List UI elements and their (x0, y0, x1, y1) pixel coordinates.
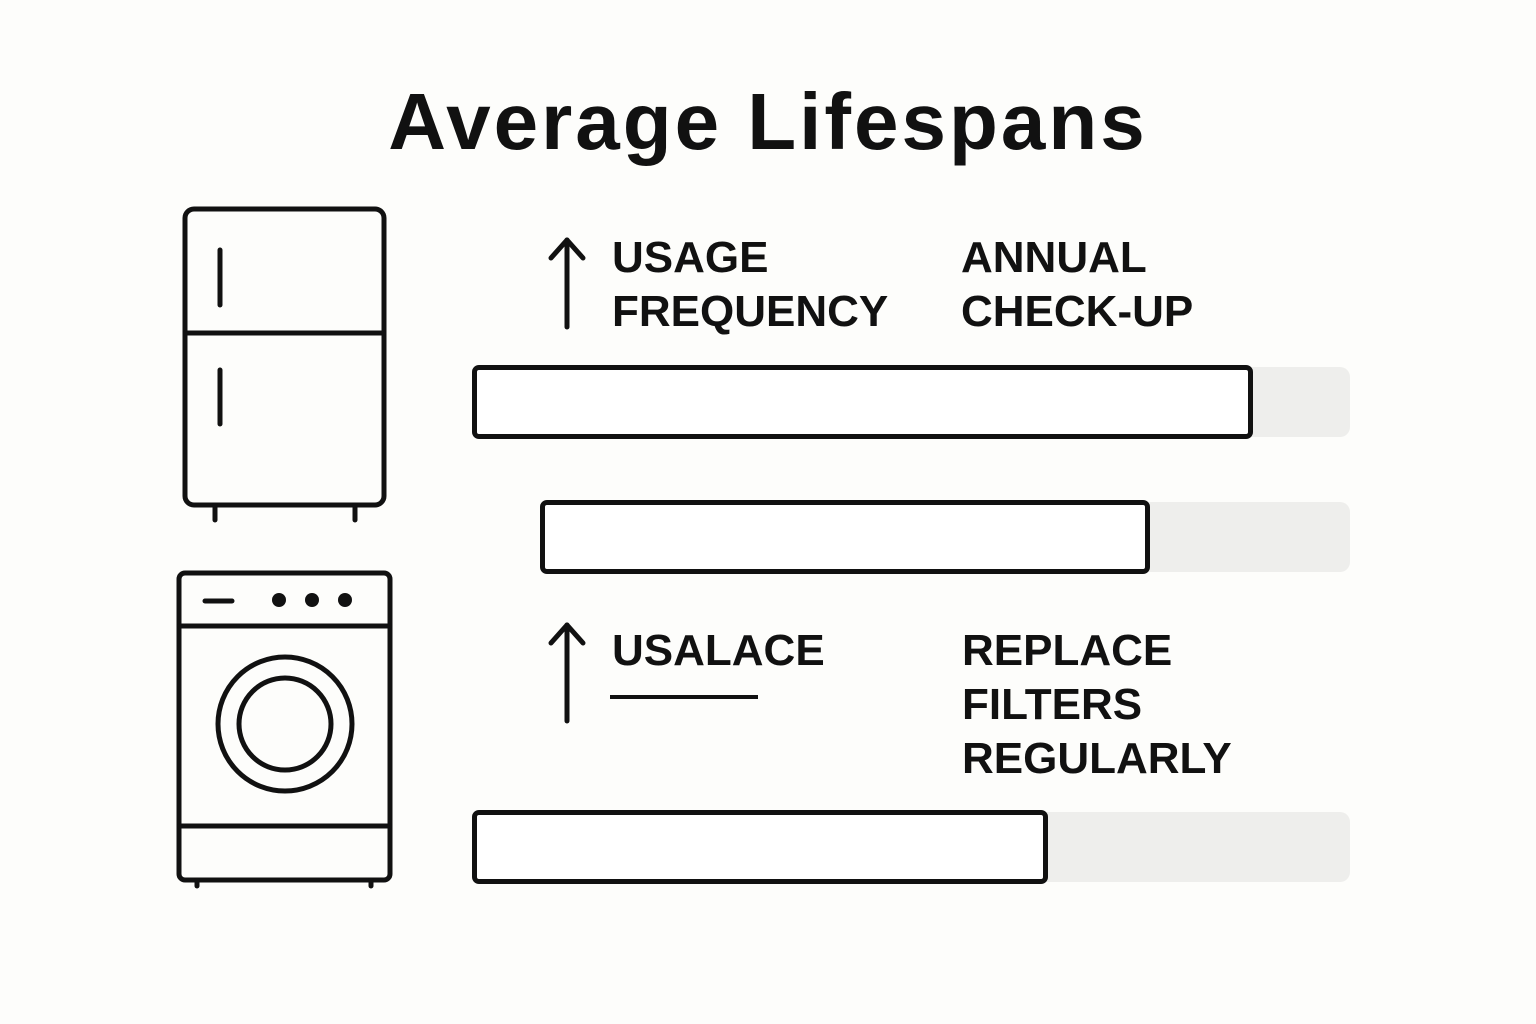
label: annual check-up: CHECK-UP (961, 287, 1193, 336)
title: Average Lifespans (388, 77, 1148, 166)
bar 2 (540, 500, 1350, 574)
icon: refrigerator (182, 206, 386, 522)
label: usalace with underline: USALACE (612, 626, 825, 675)
label: usage frequency: USAGE (612, 233, 768, 282)
bar 3 (472, 810, 1350, 884)
label: replace filters regularly: FILTERS (962, 680, 1142, 729)
label: annual check-up: ANNUAL (961, 233, 1147, 282)
label: replace filters regularly: REGULARLY (962, 734, 1232, 783)
label: usage frequency: FREQUENCY (612, 287, 888, 336)
icon: washing machine (176, 570, 392, 888)
bar 1 (472, 365, 1350, 439)
label: usalace with underline (610, 626, 825, 699)
label: usage frequency (612, 233, 888, 336)
label: replace filters regularly: REPLACE (962, 626, 1172, 675)
arrow: usage frequency up (548, 238, 586, 330)
label: replace filters regularly (962, 626, 1232, 783)
arrow: usalace up (548, 622, 586, 724)
label: annual check-up (961, 233, 1193, 336)
